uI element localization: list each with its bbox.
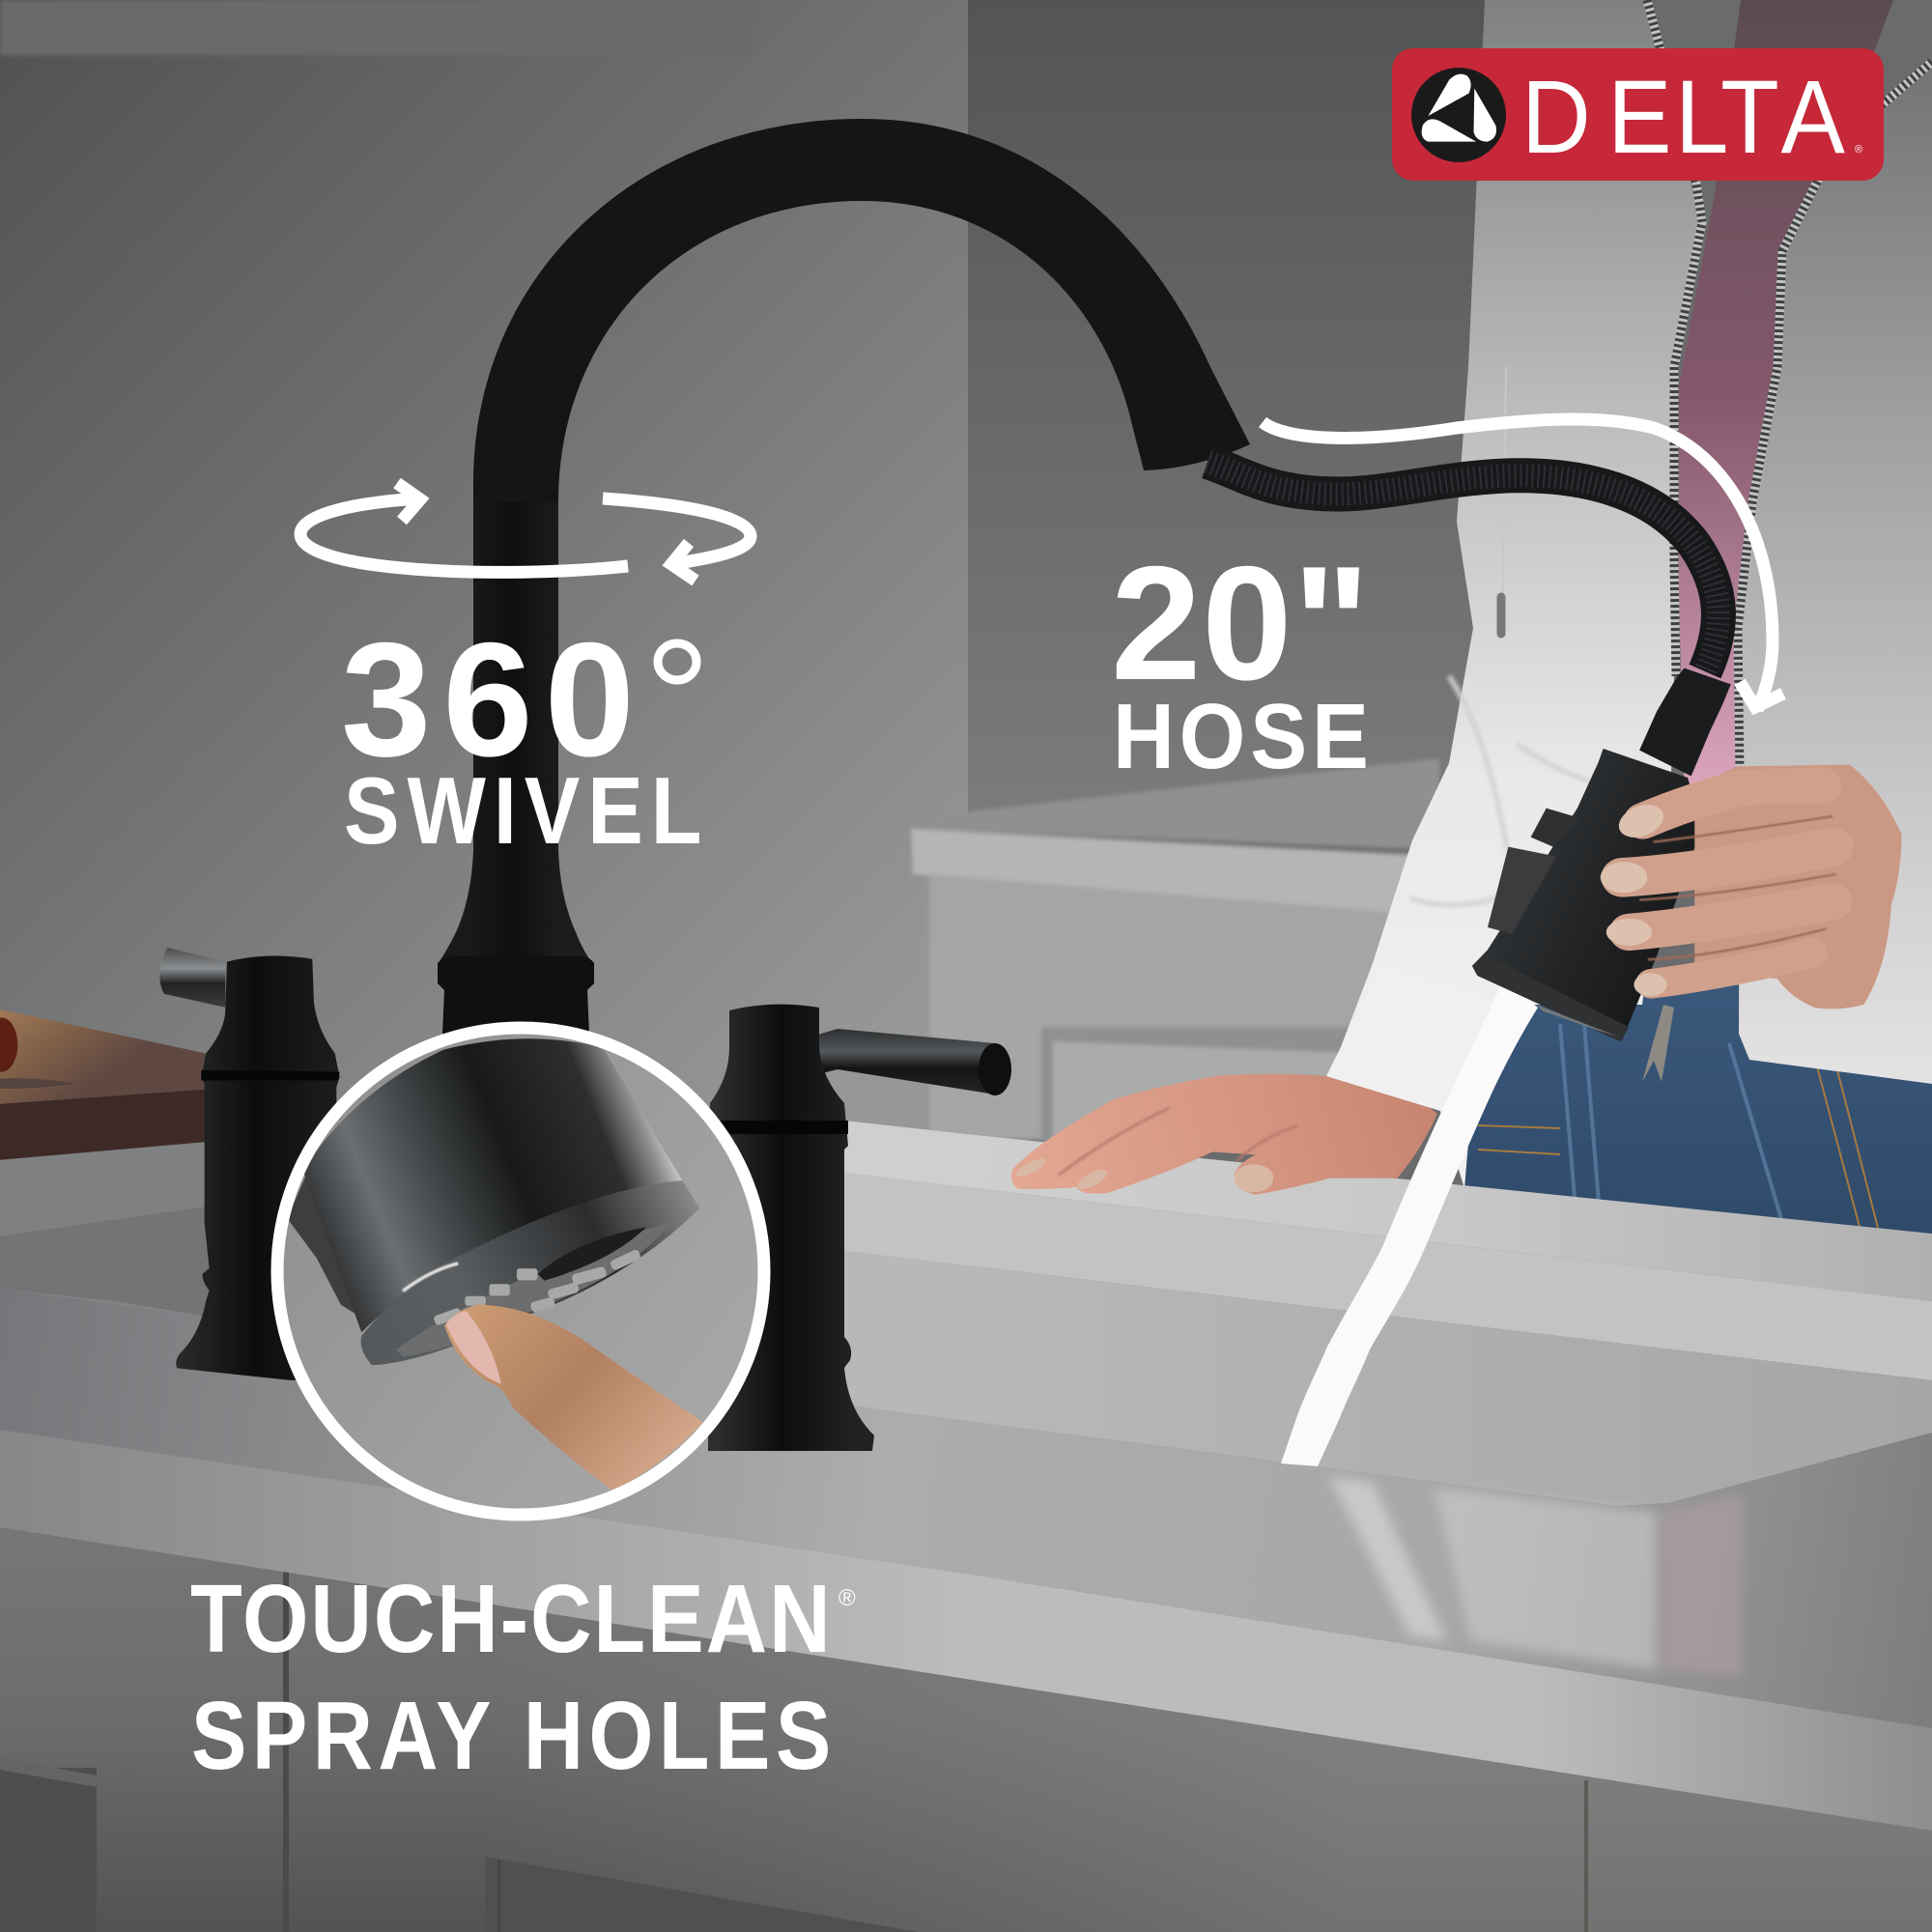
zippers [1647,0,1932,773]
spray hose [1208,462,1719,671]
logo emblem [1411,68,1506,162]
right handle body [708,1005,874,1451]
pause toggle [1488,847,1556,934]
left lever [159,948,225,1008]
water stream [1281,980,1538,1466]
faucet neck and spout [438,119,1250,1034]
lower cabinets [0,1507,1932,1932]
back wall: left [0,0,968,1352]
zipper pull [1642,1005,1674,1082]
hose connector [1639,668,1731,776]
spray mode button [1531,809,1579,847]
fingernails [1601,799,1669,996]
left faucet handle [159,948,355,1380]
sprayer face [396,1220,673,1356]
pink shirt [1679,0,1893,831]
sprayer body [1472,749,1701,1040]
sprayer face ring [361,1180,699,1365]
back wall: right [968,0,1509,831]
delta logo [1392,48,1884,181]
left counter and cutting board [0,1009,213,1318]
swivel arrow right [603,498,751,581]
jeans [1454,985,1932,1236]
degree mark [658,643,696,680]
swivel label: SWIVEL [344,757,701,864]
touch-clean inset [277,1028,764,1515]
touch-clean nozzles [433,1249,641,1325]
spray head base [1472,956,1629,1041]
hose length arrow [1263,419,1783,710]
sprayer close-up body [303,1038,682,1332]
right hand [1601,765,1902,1009]
rear counter and cabinet [911,758,1439,1143]
swivel arrow left [300,483,628,572]
upper shelf [0,0,758,55]
inset background [277,1028,764,1515]
hose label: HOSE [1113,685,1369,788]
swivel arrows [300,483,751,581]
left hand on counter [1011,1074,1437,1195]
logo registered mark: ® [1855,144,1862,156]
360 label: 360 [341,609,635,790]
spray holes label: SPRAY HOLES [191,1682,831,1789]
left handle body [176,956,355,1380]
inset ring [277,1028,764,1515]
woman in hoodie [1331,0,1932,1236]
sprayer side [287,1170,355,1314]
countertop front edge [0,1430,1932,1831]
right faucet handle [708,1005,1011,1451]
logo badge [1392,48,1884,181]
main countertop [0,1289,1932,1728]
pull-down sprayer and hand [1472,668,1902,1041]
hoodie folds [1410,676,1662,905]
registered mark: ® [838,1585,856,1611]
fingertip [444,1305,703,1492]
hoodie right panel [1738,62,1932,1084]
sink back ledge [844,1121,1932,1506]
cutting board [0,1009,213,1160]
right lever [795,1029,1003,1094]
20 inch label: 20" [1111,532,1370,714]
touch-clean label: TOUCH-CLEAN [190,1565,831,1672]
hoodie left panel and sleeve [1331,0,1700,1188]
hoodie drawstring [1501,367,1506,634]
hoodie cuff over hand [1326,966,1507,1111]
logo wordmark: DELTA [1521,58,1845,175]
faucet base [440,850,591,961]
left hand nails [1013,1155,1273,1193]
counter reflections [1329,1477,1743,1676]
